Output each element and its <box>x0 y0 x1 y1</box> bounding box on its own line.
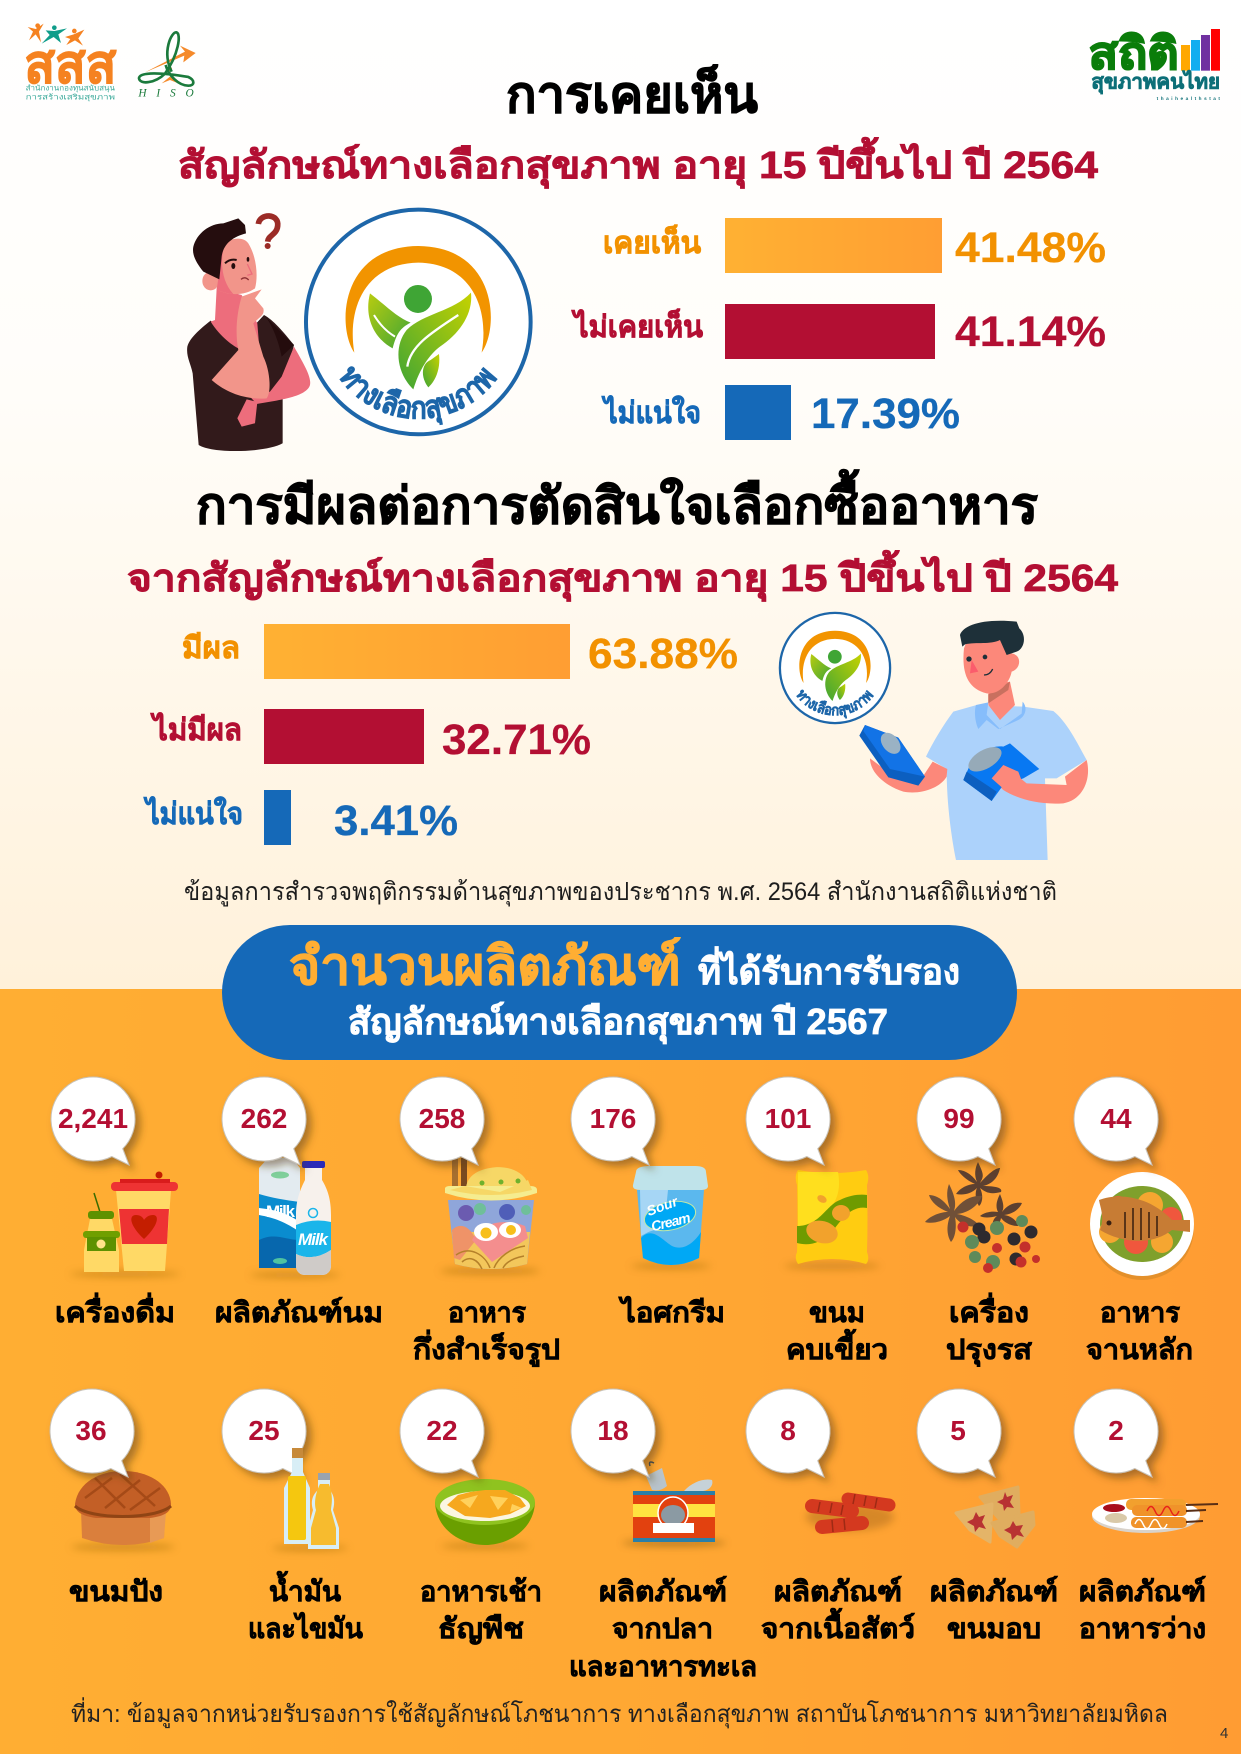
item: instant food <box>400 1077 560 1367</box>
icon: fish plate <box>1090 1172 1194 1280</box>
icon: cereal bowl <box>435 1479 535 1549</box>
illustration: man with food packages <box>859 621 1088 860</box>
item: breakfast cereal <box>400 1389 542 1645</box>
count bubble: 36: 36 <box>75 1415 107 1446</box>
count bubble: 5 <box>917 1389 1001 1477</box>
item: ice cream <box>571 1077 725 1328</box>
logo: healthier choice small: ทางเลือกสุขภาพ <box>796 690 874 719</box>
count bubble: 99 <box>917 1077 1001 1165</box>
title: purchase influence: การมีผลต่อการตัดสินใจเลือกซื้ออาหาร <box>196 469 1038 534</box>
background: upper cream section <box>0 0 1241 989</box>
label: oils: และไขมัน <box>248 1612 363 1644</box>
row: influenced: มีผล <box>182 632 240 665</box>
icon: milk: Milk <box>266 1202 296 1221</box>
count bubble: 2 <box>1074 1389 1158 1477</box>
icon: spices <box>925 1162 1040 1273</box>
logo: health statistics <box>1089 29 1220 101</box>
row: not seen <box>571 304 1106 359</box>
row: seen: 41.48% <box>955 224 1106 272</box>
count bubble: 2,241: 2,241 <box>58 1103 128 1134</box>
icon: corn dogs on plate <box>1092 1498 1218 1533</box>
row: not influenced <box>150 709 591 764</box>
logo: healthier choice large <box>304 208 533 436</box>
item: oils <box>222 1389 363 1644</box>
label: seasonings: ปรุงรส <box>946 1334 1033 1367</box>
icon: sour cream cup <box>631 1166 711 1269</box>
icon: milk <box>250 1158 340 1278</box>
count bubble: 101 <box>746 1077 830 1165</box>
row: not influenced: ไม่มีผล <box>150 712 242 747</box>
label: snacks: คบเขี้ยว <box>786 1328 888 1365</box>
chart: awareness bars <box>571 218 1106 440</box>
label: snack meals: อาหารว่าง <box>1079 1613 1206 1644</box>
icon: sour cream cup: Sour <box>644 1192 681 1219</box>
label: oils <box>248 1570 363 1644</box>
label: seasonings <box>946 1292 1033 1367</box>
label: ice cream: ไอศกรีม <box>618 1296 725 1328</box>
count bubble: 25: 25 <box>248 1415 280 1446</box>
count bubble: 25 <box>222 1389 306 1477</box>
banner: number of certified products: ที่ได้รับการรับรอง <box>698 946 960 992</box>
row: not sure: 17.39% <box>811 390 960 438</box>
banner: number of certified products: สัญลักษณ์ทางเลือกสุขภาพ ปี 2567 <box>348 1001 888 1045</box>
label: snack meals: ผลิตภัณฑ์ <box>1079 1576 1206 1607</box>
icon: pastries <box>956 1487 1034 1547</box>
icon: chip bag <box>784 1170 880 1270</box>
label: main dishes: อาหาร <box>1100 1297 1180 1328</box>
page number: 4 <box>1220 1725 1228 1742</box>
count bubble: 44: 44 <box>1100 1103 1132 1134</box>
row: not seen: ไม่เคยเห็น <box>571 308 703 344</box>
label: baked goods <box>930 1576 1058 1644</box>
logo: health statistics: สถิติ <box>1089 30 1179 79</box>
label: fish and seafood: จากปลา <box>612 1613 713 1644</box>
row: not influenced: 32.71% <box>442 716 591 764</box>
icon: milk: Milk <box>298 1230 330 1249</box>
label: beverages: เครื่องดื่ม <box>55 1292 175 1328</box>
count bubble: 176: 176 <box>590 1103 636 1134</box>
item: dairy <box>215 1077 383 1328</box>
icon: drinks <box>70 1172 180 1277</box>
label: breakfast cereal: ธัญพืช <box>438 1613 524 1645</box>
title: awareness: การเคยเห็น <box>506 64 758 123</box>
label: snack meals <box>1079 1576 1206 1644</box>
item: fish and seafood <box>569 1389 757 1682</box>
count bubble: 8: 8 <box>780 1415 796 1446</box>
count bubble: 22: 22 <box>426 1415 458 1446</box>
label: instant food <box>413 1297 560 1367</box>
count bubble: 8 <box>746 1389 830 1477</box>
icon: noodle cup <box>440 1158 540 1274</box>
logo: healthier choice small <box>778 612 892 724</box>
label: instant food: กึ่งสำเร็จรูป <box>413 1329 560 1367</box>
label: fish and seafood: ผลิตภัณฑ์ <box>599 1576 727 1607</box>
count bubble: 258: 258 <box>419 1103 465 1134</box>
illustration: thinking man <box>187 216 310 451</box>
count bubble: 262: 262 <box>241 1103 287 1134</box>
banner: number of certified products <box>222 925 1017 1060</box>
source note: survey: ข้อมูลการสำรวจพฤติกรรมด้านสุขภาพของประชากร พ.ศ. 2564 สำนักงานสถิติแห่งชาติ <box>184 878 1057 907</box>
row: influenced <box>182 624 738 679</box>
icon: sour cream cup: Cream <box>649 1209 692 1234</box>
count bubble: 258 <box>400 1077 484 1165</box>
item: beverages <box>51 1077 180 1328</box>
logo: HISO: H I S O <box>137 88 194 100</box>
label: bread: ขนมปัง <box>69 1576 163 1607</box>
label: dairy: ผลิตภัณฑ์นม <box>215 1297 383 1328</box>
count bubble: 101: 101 <box>765 1103 811 1134</box>
item: baked goods <box>917 1389 1058 1644</box>
item: meat products <box>746 1389 915 1644</box>
item: bread <box>50 1389 175 1607</box>
logo: ThaiHealth สสส: สำนักงานกองทุนสนับสนุน <box>26 83 115 92</box>
item: seasonings <box>917 1077 1040 1367</box>
label: baked goods: ขนมอบ <box>947 1613 1041 1644</box>
logo: HISO <box>137 32 196 100</box>
count bubble: 2,241 <box>51 1077 135 1165</box>
logo: healthier choice large: ทางเลือกสุขภาพ <box>339 366 498 426</box>
row: seen: เคยเห็น <box>603 224 701 260</box>
label: oils: น้ำมัน <box>269 1570 341 1607</box>
count bubble: 36 <box>50 1389 134 1477</box>
count bubble: 262 <box>222 1077 340 1278</box>
label: fish and seafood: และอาหารทะเล <box>569 1651 757 1682</box>
row: not sure: ไม่แน่ใจ <box>143 796 243 831</box>
logo: health statistics: thaihealthstat <box>1157 96 1220 101</box>
row: influenced: 63.88% <box>588 630 738 678</box>
row: not sure: 3.41% <box>334 797 458 845</box>
banner: number of certified products: จำนวนผลิตภัณฑ์ <box>289 937 681 996</box>
row: not sure <box>601 385 960 440</box>
label: meat products <box>761 1576 915 1644</box>
label: snacks: ขนม <box>809 1297 865 1328</box>
label: main dishes: จานหลัก <box>1086 1334 1193 1365</box>
logo: ThaiHealth สสส: สสส <box>24 36 117 95</box>
background: lower orange section <box>0 989 1241 1754</box>
label: baked goods: ผลิตภัณฑ์ <box>930 1576 1058 1607</box>
row: seen <box>603 218 1106 273</box>
count bubble: 176 <box>571 1077 655 1165</box>
count bubble: 18: 18 <box>597 1415 629 1446</box>
label: meat products: จากเนื้อสัตว์ <box>761 1607 915 1644</box>
label: meat products: ผลิตภัณฑ์ <box>774 1576 902 1607</box>
source note: certification: ที่มา: ข้อมูลจากหน่วยรับรองการใช้สัญลักษณ์โภชนาการ ทางเลือกสุขภาพ สถาบันโภชนาการ มหาวิทยาลัยมหิดล <box>71 1697 1168 1729</box>
count bubble: 99: 99 <box>943 1103 975 1134</box>
count bubble: 18 <box>571 1389 655 1477</box>
item: snacks <box>746 1077 888 1365</box>
logo: ThaiHealth สสส: การสร้างเสริมสุขภาพ <box>26 93 115 102</box>
logo: health statistics: สุขภาพคนไทย <box>1091 70 1220 95</box>
subtitle: purchase influence: จากสัญลักษณ์ทางเลือกสุขภาพ อายุ 15 ปีขึ้นไป ปี 2564 <box>127 550 1118 602</box>
label: instant food: อาหาร <box>448 1297 526 1328</box>
count bubble: 5: 5 <box>950 1415 966 1446</box>
label: breakfast cereal: อาหารเช้า <box>420 1576 542 1607</box>
icon: canned fish <box>622 1462 726 1546</box>
count bubble: 44 <box>1074 1077 1158 1165</box>
label: seasonings: เครื่อง <box>949 1292 1029 1328</box>
chart: purchase influence bars <box>143 624 738 845</box>
row: not sure: ไม่แน่ใจ <box>601 395 701 430</box>
icon: bread loaf <box>71 1471 175 1550</box>
count bubble: 22 <box>400 1389 484 1477</box>
label: snacks <box>786 1297 888 1365</box>
label: main dishes <box>1086 1297 1193 1365</box>
label: breakfast cereal <box>420 1576 542 1645</box>
count bubble: 2: 2 <box>1108 1415 1124 1446</box>
label: fish and seafood <box>569 1576 757 1682</box>
subtitle: awareness: สัญลักษณ์ทางเลือกสุขภาพ อายุ 15 ปีขึ้นไป ปี 2564 <box>178 137 1098 189</box>
item: main dishes <box>1074 1077 1194 1365</box>
item: snack meals <box>1074 1389 1218 1644</box>
row: not seen: 41.14% <box>955 308 1106 356</box>
row: not sure <box>143 790 458 845</box>
icon: sausages <box>806 1494 894 1532</box>
icon: oil bottles <box>272 1448 348 1551</box>
